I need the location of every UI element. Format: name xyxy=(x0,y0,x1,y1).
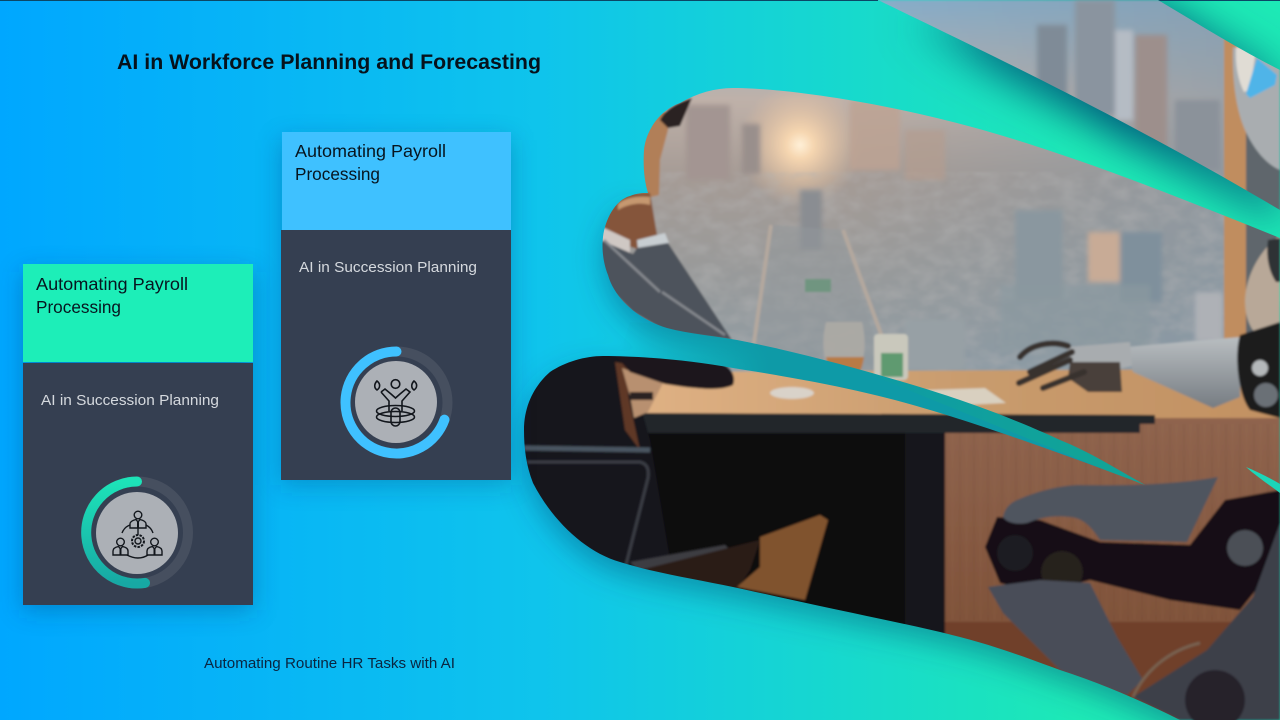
card 1 xyxy=(23,264,253,610)
chair back highlight xyxy=(524,448,650,450)
card 2 heading: Automating Payroll xyxy=(295,141,446,161)
card 1 heading: Automating Payroll xyxy=(36,274,188,294)
card 1 header xyxy=(23,264,253,362)
robot hip ring xyxy=(1133,643,1200,697)
wooden chair leg glimpse xyxy=(737,515,828,600)
card 2 header xyxy=(282,132,511,230)
teal sliver between the two photo lobes xyxy=(620,322,1155,490)
peach gap between arm and desk xyxy=(622,368,663,418)
card 2 xyxy=(281,132,511,485)
wall paneling xyxy=(996,496,1255,600)
amber drink xyxy=(825,356,865,370)
floor xyxy=(944,622,1230,670)
desk surface xyxy=(640,369,1280,420)
card 1 description: AI in Succession Planning xyxy=(41,393,219,409)
desk front edge xyxy=(640,413,1155,433)
chair frame xyxy=(527,462,648,565)
wine glass xyxy=(823,322,865,360)
robot lower mechanism xyxy=(985,490,1280,610)
cool tint on the right of the window xyxy=(948,0,1224,318)
window frame xyxy=(1224,30,1246,340)
city block texture xyxy=(640,172,1230,377)
sleeve fold highlight xyxy=(604,240,725,335)
card 2 heading: Processing xyxy=(295,164,380,184)
robot lower leg xyxy=(988,580,1143,695)
card 1 progress ring xyxy=(86,482,188,584)
man's face xyxy=(640,112,668,200)
jar green label xyxy=(881,353,903,377)
avenue through the city xyxy=(769,228,843,267)
man forearm on desk xyxy=(622,356,736,390)
robot joint discs xyxy=(1252,360,1268,376)
robot torso dark seam xyxy=(1267,238,1280,282)
icon: person in rings with leaves xyxy=(375,380,417,426)
distant skyscrapers xyxy=(686,0,1223,370)
hand highlight xyxy=(618,197,650,210)
robot fingers xyxy=(1019,343,1084,388)
footer caption: Automating Routine HR Tasks with AI xyxy=(204,656,455,672)
man's cuff xyxy=(637,233,669,250)
shadow behind top photo wedge xyxy=(878,0,1280,228)
chair seat edge xyxy=(630,545,730,572)
small wedge at right edge xyxy=(1246,467,1280,493)
sun glow xyxy=(752,92,850,200)
top edge line xyxy=(0,0,1280,1)
robot thigh armor panel xyxy=(1003,477,1218,542)
white shirt xyxy=(600,226,630,256)
jar body xyxy=(874,334,908,380)
icon: team around a gear xyxy=(113,511,162,558)
card 2 icon disc xyxy=(355,361,437,443)
man's suit sleeve xyxy=(596,240,732,340)
green rooftop xyxy=(805,279,831,292)
robot torso curve xyxy=(1245,235,1280,340)
card 2 body xyxy=(281,230,511,480)
card 2 shadow xyxy=(281,140,511,485)
man dark torso and chair xyxy=(500,340,670,600)
card 1 shadow xyxy=(23,272,253,610)
robot glowing blue panel xyxy=(1246,58,1277,98)
shirt and brown lit area xyxy=(615,362,640,450)
card 1 body xyxy=(23,363,253,605)
robot right body armor xyxy=(1133,523,1280,720)
man's hair xyxy=(660,98,692,128)
robot head highlight xyxy=(1236,47,1256,92)
card 1 icon disc xyxy=(96,492,178,574)
robot discs xyxy=(997,535,1033,571)
window sky and city haze xyxy=(618,0,1226,373)
card 2 description: AI in Succession Planning xyxy=(299,260,477,276)
robot back behind frame xyxy=(1244,132,1280,334)
slide title: AI in Workforce Planning and Forecasting xyxy=(117,50,541,74)
coaster on desk xyxy=(770,387,814,399)
paper on desk xyxy=(925,388,1006,406)
man's hand xyxy=(600,193,658,250)
dark bar behind the gap xyxy=(630,392,653,400)
robot hip dark xyxy=(1185,670,1245,720)
wooden wall under desk xyxy=(945,418,1280,720)
dark trousers under desk xyxy=(646,432,907,624)
card 1 heading: Processing xyxy=(36,297,121,317)
robot wrist xyxy=(1067,342,1132,372)
card 2 progress ring xyxy=(345,351,448,454)
robot head xyxy=(1233,47,1280,170)
robot shoulder mechanism xyxy=(1237,322,1280,418)
robot forearm xyxy=(1127,337,1240,408)
avenue road edges xyxy=(752,224,883,344)
brown lower trousers xyxy=(640,540,760,590)
robot palm xyxy=(1068,362,1122,392)
photo: man and robot at a desk, clipped to organic shape xyxy=(500,0,1280,720)
desk leg xyxy=(904,432,946,634)
shadow behind main photo shape xyxy=(524,208,1280,720)
